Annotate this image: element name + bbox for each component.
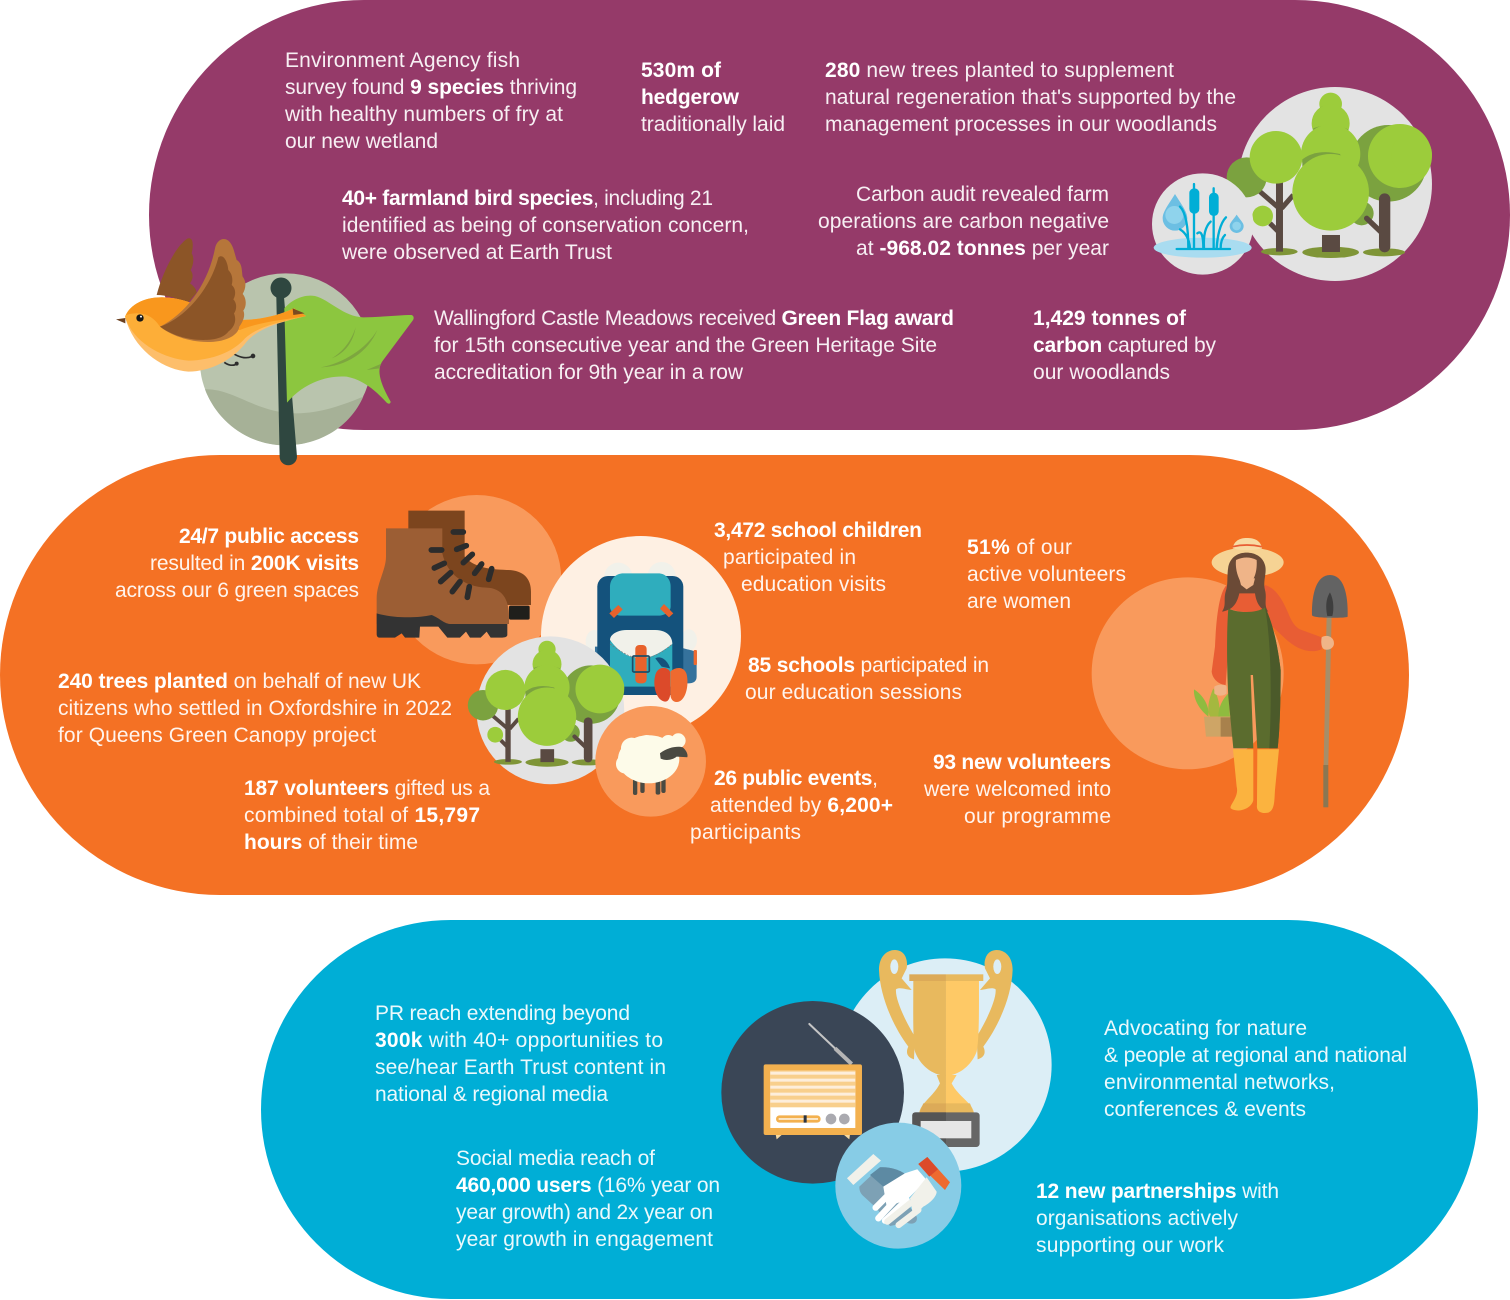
icon: volunteer woman with spade	[1092, 538, 1348, 813]
icon: flag circle	[200, 273, 372, 465]
text: PR reach: see/hear Earth Trust content in	[375, 1056, 666, 1079]
text: women volunteers: are women	[967, 590, 1071, 613]
text: public access: 24/7 public access	[179, 525, 359, 548]
text: fish survey: with healthy numbers of fry at	[284, 103, 563, 126]
text: farmland birds	[341, 187, 749, 264]
text: hedgerow: traditionally laid	[641, 113, 785, 136]
text: carbon audit: Carbon audit revealed farm	[856, 183, 1109, 206]
text: social media: year growth) and 2x year on	[456, 1201, 713, 1224]
text: public events: 26 public events,	[714, 767, 878, 790]
text: advocating	[1104, 1017, 1407, 1121]
text: farmland birds: identified as being of conservation concern,	[342, 214, 749, 237]
text: women volunteers: active volunteers	[967, 563, 1126, 586]
icon: handshake	[835, 1123, 961, 1249]
text: trees planted: citizens who settled in Oxfordshire in 2022	[58, 697, 452, 720]
text: carbon audit	[818, 183, 1109, 260]
text: carbon captured	[1033, 307, 1216, 384]
text: volunteers hours: combined total of 15,797	[244, 804, 480, 827]
text: social media: year growth in engagement	[456, 1228, 713, 1251]
text: partnerships	[1036, 1180, 1279, 1257]
text: women volunteers	[967, 536, 1126, 613]
text: public access: resulted in 200K visits	[150, 552, 359, 575]
text: PR reach: national & regional media	[375, 1083, 608, 1106]
text: school children: education visits	[741, 573, 886, 596]
text: advocating: conferences & events	[1104, 1098, 1306, 1121]
text: trees planted: 240 trees planted on behalf of new UK	[58, 670, 421, 693]
icon: wetland reeds	[1152, 173, 1253, 275]
text: green flag award: Wallingford Castle Meadows received Green Flag award	[434, 307, 954, 330]
text: fish survey: Environment Agency fish	[285, 49, 520, 72]
text: school children	[714, 519, 922, 596]
text: public events	[690, 767, 893, 844]
icon: sheep	[595, 706, 706, 817]
text: schools	[745, 654, 989, 704]
icon: woodland trees	[1227, 87, 1432, 281]
text: carbon captured: 1,429 tonnes of	[1033, 307, 1187, 330]
text: new volunteers: 93 new volunteers	[933, 751, 1111, 774]
text: hedgerow: 530m of	[641, 59, 722, 82]
text: public access	[115, 525, 359, 602]
text: fish survey: our new wetland	[285, 130, 438, 153]
text: new volunteers: were welcomed into	[923, 778, 1111, 801]
text: new trees: 280 new trees planted to supplement	[825, 59, 1174, 82]
icon: flagpole	[276, 297, 297, 465]
text: PR reach: PR reach extending beyond	[375, 1002, 630, 1025]
text: farmland birds: were observed at Earth Trust	[341, 241, 612, 264]
icon: backpack	[541, 536, 741, 736]
text: schools: our education sessions	[745, 681, 962, 704]
text: partnerships: organisations actively	[1036, 1207, 1238, 1230]
text: fish survey	[284, 49, 577, 153]
text: school children: participated in	[723, 546, 856, 569]
text: volunteers hours: hours of their time	[244, 831, 418, 854]
text: trees planted: for Queens Green Canopy project	[58, 724, 376, 747]
text: new volunteers	[923, 751, 1111, 828]
text: advocating: environmental networks,	[1104, 1071, 1335, 1094]
text: partnerships: 12 new partnerships with	[1036, 1180, 1279, 1203]
text: volunteers hours	[244, 777, 490, 854]
text: new trees: management processes in our woodlands	[825, 113, 1217, 136]
text: advocating: & people at regional and national	[1104, 1044, 1407, 1067]
icon: walking boots	[377, 495, 561, 664]
text: hedgerow	[641, 59, 785, 136]
text: PR reach	[375, 1002, 666, 1106]
text: school children: 3,472 school children	[714, 519, 922, 542]
text: volunteers hours: 187 volunteers gifted us a	[244, 777, 490, 800]
text: hedgerow: hedgerow	[641, 86, 740, 109]
text: fish survey: survey found 9 species thriving	[285, 76, 577, 99]
icon: green flag	[284, 296, 414, 404]
text: social media: Social media reach of	[456, 1147, 655, 1170]
text: women volunteers: 51% of our	[967, 536, 1072, 559]
text: carbon audit: operations are carbon negative	[818, 210, 1109, 233]
text: carbon captured: carbon captured by	[1033, 334, 1216, 357]
text: green flag award	[434, 307, 954, 384]
panel: advocacy	[261, 920, 1478, 1299]
text: schools: 85 schools participated in	[748, 654, 989, 677]
text: new trees	[825, 59, 1236, 136]
icon: radio	[721, 1001, 904, 1184]
text: trees planted	[58, 670, 452, 747]
text: green flag award: accreditation for 9th year in a row	[434, 361, 744, 384]
text: carbon captured: our woodlands	[1033, 361, 1170, 384]
text: public access: across our 6 green spaces	[115, 579, 359, 602]
icon: trees circle	[468, 636, 624, 784]
panel: environment	[149, 0, 1510, 430]
text: farmland birds: 40+ farmland bird species, including 21	[342, 187, 713, 210]
text: social media: 460,000 users (16% year on	[456, 1174, 720, 1197]
text: new trees: natural regeneration that's supported by the	[825, 86, 1236, 109]
text: social media	[456, 1147, 720, 1251]
text: PR reach: 300k with 40+ opportunities to	[375, 1029, 663, 1052]
text: green flag award: for 15th consecutive year and the Green Heritage Site	[434, 334, 937, 357]
icon: pole knob	[270, 278, 292, 298]
text: advocating: Advocating for nature	[1104, 1017, 1307, 1040]
icon: bird	[116, 238, 306, 372]
text: partnerships: supporting our work	[1036, 1234, 1224, 1257]
text: public events: attended by 6,200+	[710, 794, 893, 817]
text: public events: participants	[690, 821, 801, 844]
panel: people	[0, 455, 1409, 895]
icon: trophy	[838, 950, 1052, 1172]
text: carbon audit: at -968.02 tonnes per year	[856, 237, 1109, 260]
text: new volunteers: our programme	[964, 805, 1111, 828]
